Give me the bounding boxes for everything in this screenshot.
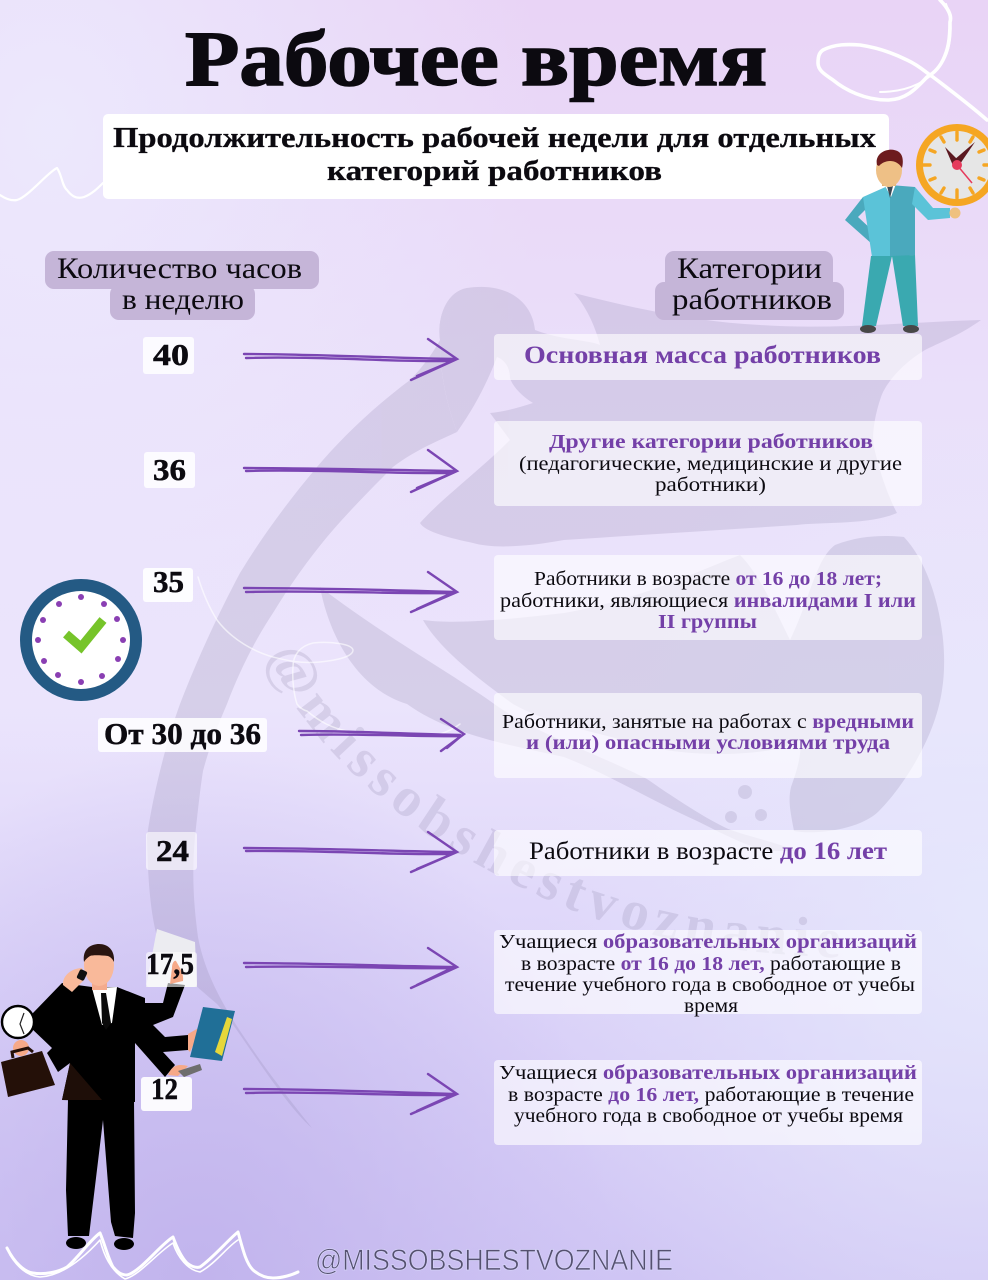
icon: clock with check mark [20, 579, 142, 701]
hours label [144, 452, 195, 488]
watermark: animal silhouette [148, 287, 980, 1127]
social handle: @MISSOBSHESTVOZNANIE [315, 1244, 673, 1277]
category card: работники, являющиеся инвалидами I или [500, 590, 916, 612]
category card: работники) [655, 474, 766, 496]
shirt and tie [92, 987, 117, 1025]
head [92, 978, 107, 990]
phone hand [63, 968, 84, 992]
hours label: 40 [153, 337, 189, 372]
arrow [244, 832, 457, 872]
hours label: 17,5: 17,5 [146, 946, 194, 981]
hours label: 12 [141, 1071, 192, 1111]
arrow [244, 1074, 457, 1114]
title: Рабочее время [185, 15, 767, 102]
briefcase [1, 1048, 55, 1097]
hours label [143, 564, 193, 602]
subtitle panel [103, 114, 889, 199]
row 4: 30 to 36 hours [98, 693, 922, 778]
smartphone [178, 1064, 202, 1077]
row 1: 40 hours [143, 334, 922, 380]
category card [494, 334, 922, 380]
arrow [299, 719, 464, 751]
subtitle panel: Продолжительность рабочей недели для отдельных [113, 122, 877, 154]
hours label: 24 [156, 833, 189, 868]
category card: время [684, 995, 739, 1017]
row 3: 35 hours [143, 555, 922, 640]
heading: worker categories: работников [672, 283, 832, 316]
wall clock [2, 1006, 34, 1038]
hours label [143, 337, 194, 374]
icon: orange clock [916, 124, 988, 206]
legs [66, 1100, 135, 1238]
icon: man in teal suit with clock [845, 124, 988, 333]
blue folder [190, 1007, 235, 1061]
category card: Основная масса работников [524, 342, 881, 369]
category card: (педагогические, медицинские и другие [519, 453, 902, 475]
category card [494, 930, 922, 1017]
category card: Работники, занятые на работах с вредными [502, 711, 914, 733]
category card [494, 693, 922, 778]
icon: multitasking businessman [1, 929, 235, 1250]
category card: Работники в возрасте до 16 лет [529, 838, 887, 865]
suit with arms [30, 983, 188, 1102]
paper held in hand [146, 929, 197, 987]
heading: hours per week: в неделю [122, 283, 244, 316]
subtitle panel: категорий работников [327, 155, 662, 187]
category card: II группы [658, 611, 757, 633]
category card: Другие категории работников [549, 431, 873, 453]
category card [494, 421, 922, 506]
arrow [244, 572, 457, 612]
arrow [244, 339, 457, 380]
category card: течение учебного года в свободное от учебы [505, 974, 915, 996]
heading: worker categories [655, 251, 844, 320]
category card: в возрасте до 16 лет, работающие в течение [508, 1084, 914, 1106]
category card: Учащиеся образовательных организаций [499, 931, 917, 953]
category card: учебного года в свободное от учебы время [514, 1105, 904, 1127]
category card: Учащиеся образовательных организаций [499, 1062, 917, 1084]
arrow [244, 948, 457, 988]
category card [494, 555, 922, 640]
heading: worker categories: Категории [677, 252, 822, 285]
row 6 arrow and card: 17.5 hours [244, 930, 922, 1017]
hands [13, 1040, 29, 1056]
category card [494, 830, 922, 876]
hours label: От 30 до 36 [104, 716, 261, 751]
arrow [244, 450, 457, 492]
category card: в возрасте от 16 до 18 лет, работающие в [521, 953, 901, 975]
category card [494, 1060, 922, 1145]
hours label: 12: 12 [151, 1071, 178, 1106]
watermark: animal silhouette: @missobshestvoznanie [266, 650, 807, 930]
hours label [146, 832, 197, 870]
hours label: 35 [153, 564, 184, 599]
row 7 arrow and card: 12 hours [244, 1060, 922, 1145]
hours label: 36 [153, 452, 186, 487]
row 5: 24 hours [146, 830, 922, 876]
heading: hours per week [45, 251, 319, 320]
row 2: 36 hours [144, 421, 922, 506]
heading: hours per week: Количество часов [57, 252, 302, 285]
category card: Работники в возрасте от 16 до 18 лет; [534, 568, 882, 590]
category card: и (или) опасными условиями труда [526, 732, 890, 754]
